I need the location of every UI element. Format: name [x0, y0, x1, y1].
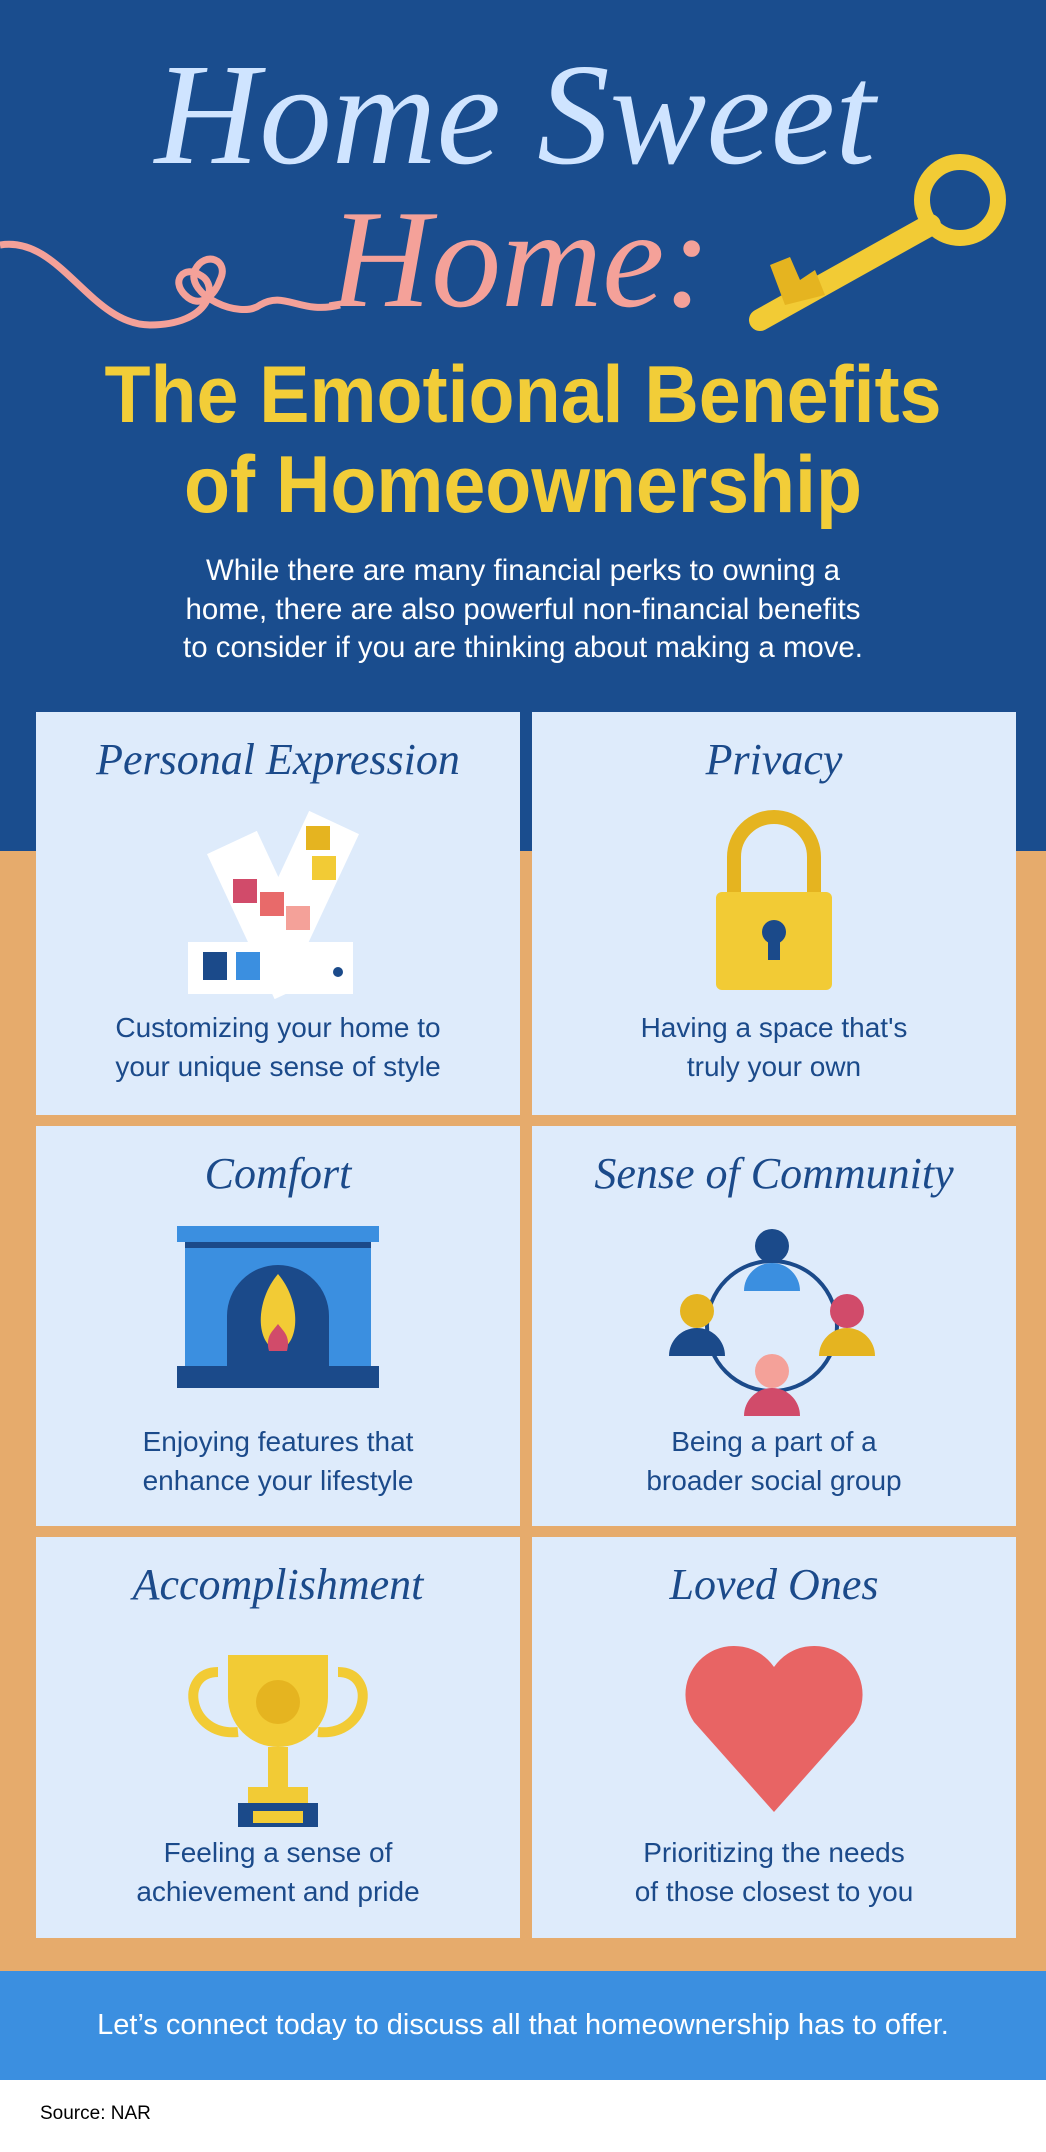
- source: Source: NAR: [40, 2103, 151, 2124]
- icon: trophy: [188, 1655, 368, 1827]
- wood background: [0, 851, 1046, 1971]
- panel: personal expression: Personal Expression: [96, 735, 460, 784]
- panel: comfort: Enjoying features that: [143, 1426, 413, 1457]
- icon: color swatches: [188, 811, 359, 999]
- intro paragraph: [183, 554, 863, 664]
- panel: comfort: enhance your lifestyle: [143, 1465, 413, 1496]
- icon: heart: [685, 1646, 863, 1812]
- panel: loved ones: Prioritizing the needs: [643, 1837, 905, 1868]
- panel: accomplishment: [36, 1537, 520, 1938]
- icon: people circle: [669, 1229, 875, 1416]
- title script: Home: with heart string: Home:: [330, 182, 711, 337]
- panel: sense of community: broader social group: [646, 1465, 902, 1496]
- panel: privacy: truly your own: [687, 1051, 861, 1082]
- panel: sense of community: Being a part of a: [671, 1426, 877, 1457]
- panel: personal expression: Customizing your home to: [115, 1012, 441, 1043]
- panel: privacy: Privacy: [706, 735, 842, 784]
- panel: comfort: Comfort: [205, 1149, 351, 1198]
- footer call to action: [0, 1971, 1046, 2080]
- icon: fireplace: [177, 1226, 379, 1388]
- panel: privacy: [532, 712, 1016, 1115]
- intro paragraph: to consider if you are thinking about making a move.: [183, 631, 863, 664]
- panel: accomplishment: Accomplishment: [133, 1560, 423, 1609]
- main title: of Homeownership: [184, 440, 862, 530]
- footer call to action: Let’s connect today to discuss all that homeownership has to offer.: [97, 2009, 949, 2041]
- intro paragraph: home, there are also powerful non-financial benefits: [186, 592, 860, 626]
- title script: Home: with heart string: [0, 182, 711, 337]
- header background: [0, 0, 1046, 851]
- title script: Home Sweet: Home Sweet: [155, 35, 875, 195]
- panel: sense of community: Sense of Community: [594, 1149, 954, 1198]
- panel: privacy: Having a space that's: [641, 1012, 907, 1043]
- panel: loved ones: of those closest to you: [635, 1876, 913, 1907]
- panel: personal expression: [36, 712, 520, 1115]
- panel: sense of community: [532, 1126, 1016, 1526]
- main title: [104, 350, 942, 530]
- panel: comfort: [36, 1126, 520, 1526]
- panel: personal expression: your unique sense of style: [115, 1051, 441, 1082]
- panel: loved ones: Loved Ones: [670, 1560, 878, 1609]
- panel: accomplishment: achievement and pride: [136, 1876, 420, 1907]
- panel: accomplishment: Feeling a sense of: [164, 1837, 392, 1868]
- icon: key: [749, 154, 1006, 331]
- icon: padlock: [716, 810, 832, 990]
- panel: loved ones: [532, 1537, 1016, 1938]
- main title: The Emotional Benefits: [104, 350, 942, 440]
- intro paragraph: While there are many financial perks to owning a: [206, 554, 840, 587]
